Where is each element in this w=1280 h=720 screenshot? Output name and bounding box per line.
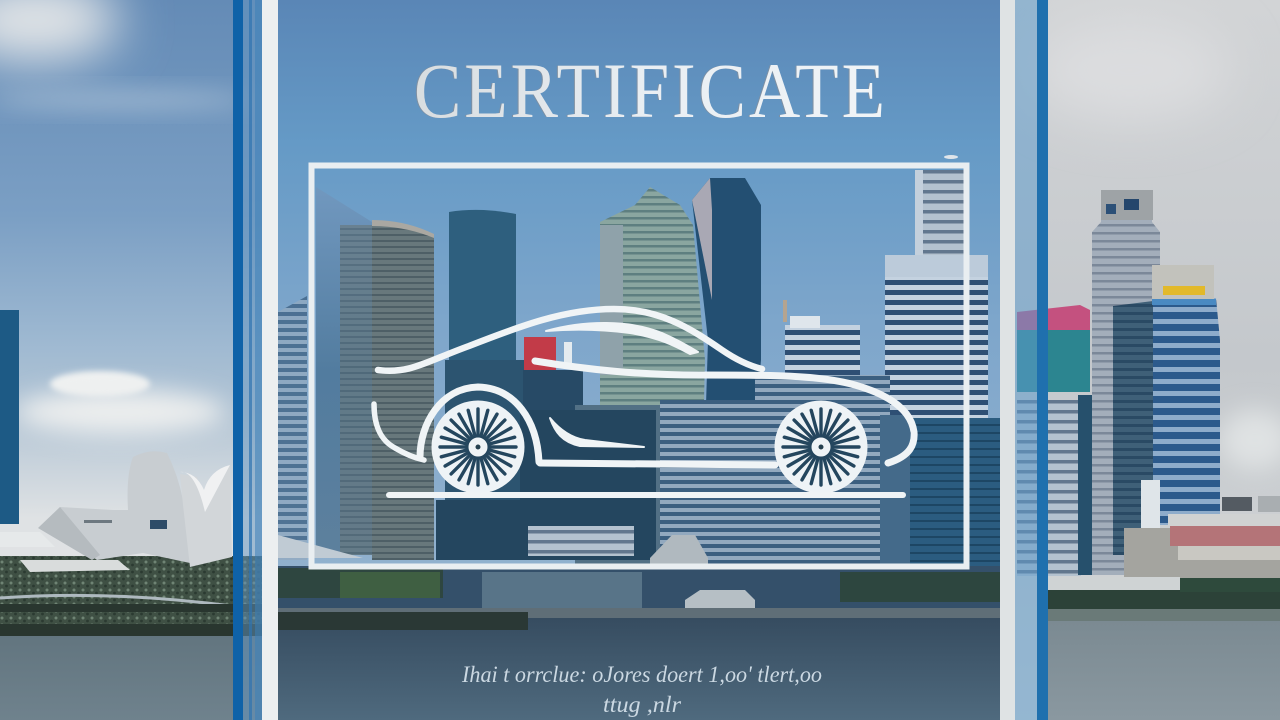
panel: right skyline photo xyxy=(1000,0,1280,720)
roof line xyxy=(378,309,762,371)
rear wheel xyxy=(432,401,524,493)
icon: car outline xyxy=(374,309,914,495)
title: CERTIFICATE xyxy=(414,48,885,135)
pink and teal building xyxy=(1017,305,1090,332)
right vertical stripes xyxy=(1000,0,1048,720)
front wheel xyxy=(775,401,867,493)
belt line and nose xyxy=(535,361,914,463)
gardens xyxy=(0,556,262,604)
rear wheel arch xyxy=(420,387,539,462)
white frame xyxy=(312,166,966,566)
panel: central certificate skyline xyxy=(278,0,1000,720)
door sill xyxy=(540,463,775,465)
low-rise red building xyxy=(1124,528,1280,578)
rear bumper xyxy=(374,404,424,460)
shoreline xyxy=(1048,577,1180,590)
skyline buildings xyxy=(278,155,1000,600)
footer text: Ihai t orrclue: oJores doert 1,oo' tlert,oo xyxy=(461,662,822,687)
left tower xyxy=(0,310,19,524)
striped tower xyxy=(1017,400,1081,576)
blue tower with yellow crown xyxy=(1153,298,1220,525)
shoreline xyxy=(0,595,278,720)
ground line xyxy=(389,492,903,498)
ArtScience Museum xyxy=(0,451,232,572)
waterfront xyxy=(278,566,1000,720)
footer text: ttug ,nlr xyxy=(603,692,682,717)
footer text xyxy=(461,662,822,717)
panel: left skyline photo xyxy=(0,0,278,720)
left vertical stripes xyxy=(233,0,278,720)
side vent xyxy=(550,418,644,447)
tall grey tower xyxy=(1092,190,1160,575)
window swoop xyxy=(546,323,698,354)
